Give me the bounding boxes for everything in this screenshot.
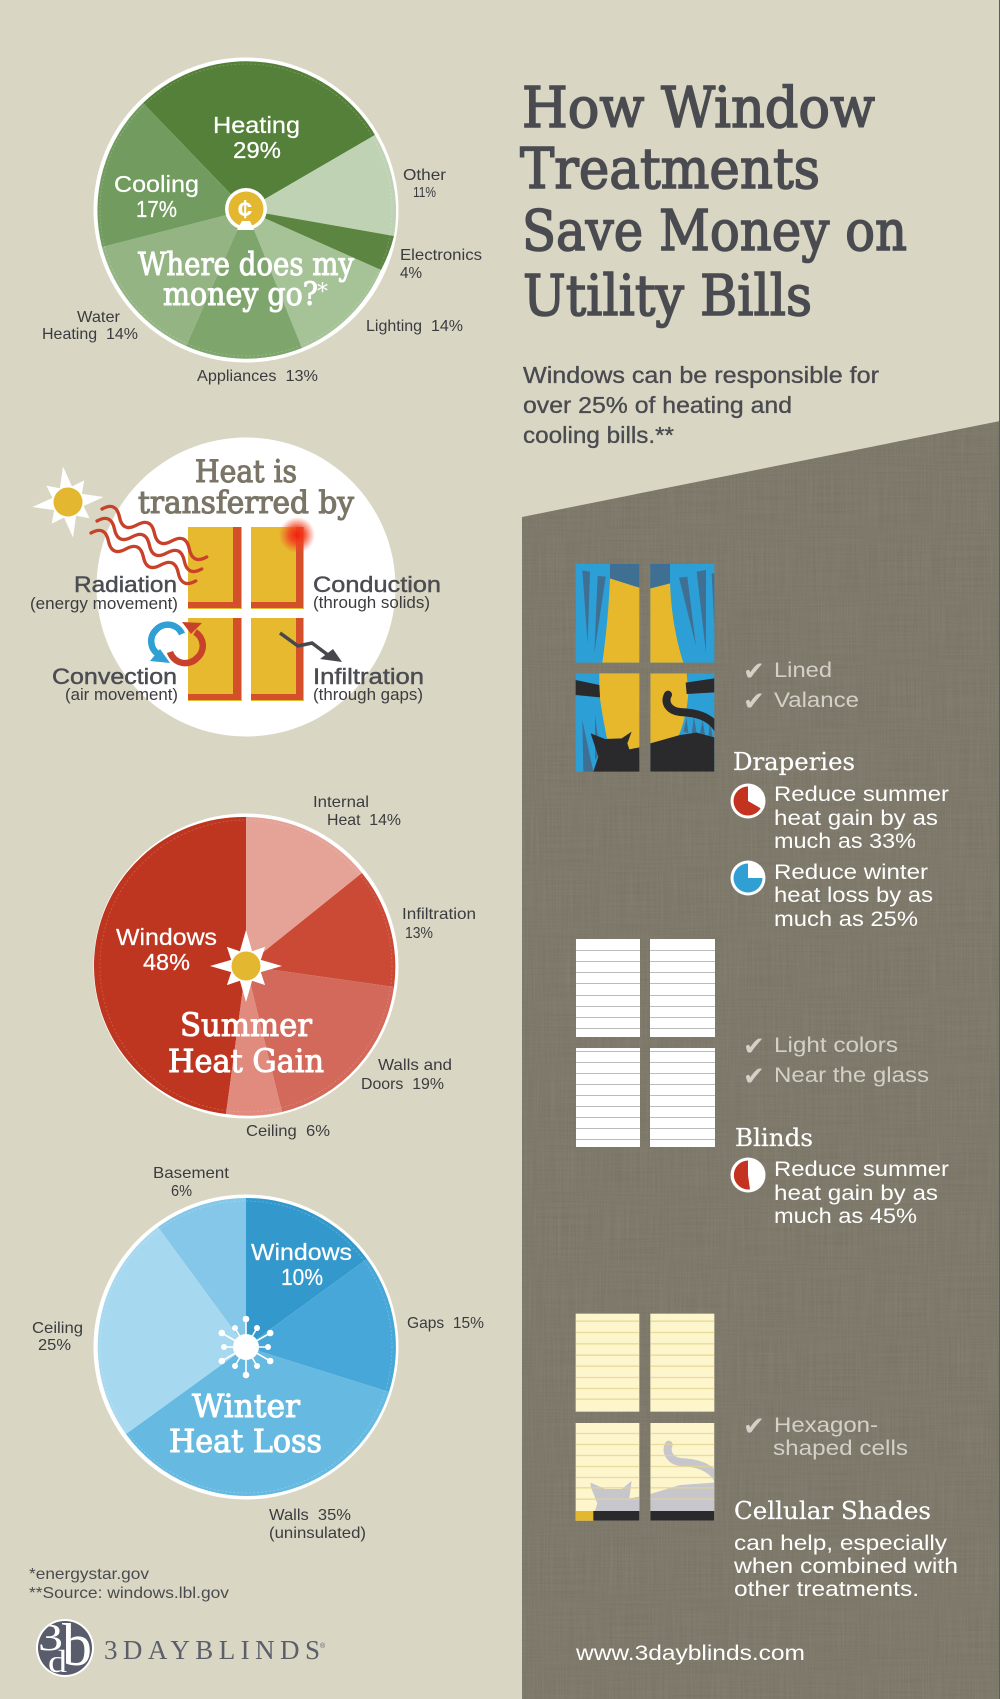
pane: bottom left with cat	[576, 1423, 639, 1521]
chart title: where does my money go: Where does my	[138, 245, 354, 283]
label: conduction: (through solids)	[313, 594, 430, 612]
label: internal heat	[313, 794, 401, 829]
checklist: draperies: ✔	[743, 687, 765, 717]
label: appliances: Appliances 13%	[197, 368, 318, 385]
label: water heating	[42, 309, 138, 343]
logo: 3dayblinds	[36, 1619, 326, 1677]
label: infiltration: Infiltration	[313, 664, 424, 689]
logo: 3dayblinds: ®	[320, 1642, 326, 1650]
label: walls and doors	[361, 1057, 452, 1093]
pane: top left	[576, 1314, 639, 1412]
logo mark: b	[62, 1612, 92, 1678]
title	[520, 76, 907, 329]
slice: appliances 13%	[186, 210, 302, 359]
slice: gaps 15%	[246, 1259, 396, 1392]
chart title: where does my money go: money go?	[163, 275, 318, 313]
slice: water heating 14%	[102, 210, 246, 346]
slice: walls 35%	[126, 1347, 389, 1496]
label: heating: Heating	[213, 112, 300, 138]
label: ceiling	[32, 1320, 83, 1354]
chart title: summer heat gain: Heat Gain	[168, 1042, 324, 1080]
checklist: cellular shades: shaped cells	[773, 1436, 908, 1460]
pane: top right	[650, 564, 714, 663]
label: walls and doors: Walls and	[378, 1057, 452, 1074]
checklist: draperies: Lined	[774, 658, 832, 682]
pane: top right	[650, 1314, 714, 1412]
footnotes: **Source: windows.lbl.gov	[29, 1585, 229, 1602]
logo mark: d	[48, 1643, 67, 1679]
text: reduce summer heat gain 45%: Reduce summer	[774, 1157, 949, 1181]
slice: windows 10%	[246, 1198, 367, 1347]
label: radiation	[30, 572, 178, 613]
label: electronics: Electronics	[400, 247, 482, 264]
pie chart: where does my money go	[94, 58, 398, 362]
text: reduce winter heat loss 25%: heat loss by as	[774, 883, 933, 907]
checklist: cellular shades: ✔	[743, 1412, 765, 1442]
slice: walls and doors 19%	[246, 966, 394, 1112]
checklist: blinds: Near the glass	[774, 1063, 929, 1087]
label: walls and doors: Doors 19%	[361, 1076, 444, 1093]
chart title: winter heat loss	[169, 1387, 322, 1460]
logo mark	[36, 1619, 94, 1677]
label: basement: Basement	[153, 1165, 230, 1182]
logo mark: 3	[38, 1617, 63, 1659]
illustration: cellular shades window	[576, 1314, 718, 1521]
text: reduce summer heat gain 45%: heat gain by as	[774, 1181, 938, 1205]
title: Treatments	[520, 137, 820, 202]
label: heating	[213, 112, 300, 163]
window panes	[188, 527, 304, 701]
slice: internal heat 14%	[246, 817, 362, 966]
pane: bottom right with cat	[650, 673, 718, 772]
label: basement	[153, 1165, 230, 1200]
slice: basement 6%	[158, 1198, 246, 1347]
chart title: where does my money go	[138, 245, 354, 313]
icon: sun	[27, 461, 109, 543]
checklist: draperies	[743, 657, 859, 717]
text: reduce summer heat gain 45%: much as 45%	[774, 1204, 917, 1228]
label: electronics: 4%	[400, 265, 422, 282]
label: cooling	[114, 171, 199, 222]
text: reduce winter heat loss 25%: much as 25%	[774, 907, 918, 931]
checklist: draperies: Valance	[774, 688, 859, 712]
subtitle text: over 25% of heating and	[523, 392, 792, 418]
heading: heat is transferred by	[138, 454, 354, 521]
label: gaps: Gaps 15%	[407, 1315, 484, 1332]
website url: www.3dayblinds.com	[575, 1641, 805, 1665]
pie chart: winter heat loss	[94, 1194, 398, 1500]
label: ceiling: Ceiling	[32, 1320, 83, 1337]
subtitle text: cooling bills.**	[523, 422, 674, 448]
icon: pie 25%	[730, 860, 766, 896]
label: windows 48%	[116, 924, 217, 975]
label: other	[403, 167, 447, 201]
slice: lighting 14%	[246, 210, 381, 348]
title: Utility Bills	[523, 264, 812, 329]
label: internal heat: Heat 14%	[327, 812, 401, 829]
label: windows 10%: Windows	[251, 1239, 352, 1265]
illustration: blinds window	[576, 939, 715, 1147]
icon: conduction heat glow	[279, 517, 315, 553]
slice: ceiling 6%	[226, 966, 282, 1116]
text: reduce winter heat loss 25%: Reduce winter	[774, 860, 928, 884]
checklist: blinds	[743, 1032, 929, 1092]
label: windows 10%: 10%	[281, 1264, 323, 1290]
label: conduction: Conduction	[313, 572, 441, 597]
label: infiltration	[313, 664, 424, 704]
label: windows 48%: 48%	[143, 949, 190, 975]
slice: infiltration 13%	[246, 873, 395, 987]
slice: electronics 4%	[246, 210, 394, 270]
heading: heat is transferred by: Heat is	[195, 454, 297, 490]
heading: heat is transferred by: transferred by	[138, 485, 354, 521]
slice: other 11%	[246, 135, 396, 236]
checklist: blinds: ✔	[743, 1062, 765, 1092]
chart title: where does my money go: *	[317, 280, 328, 305]
chart title: winter heat loss: Heat Loss	[169, 1422, 322, 1460]
heading: draperies: Draperies	[733, 748, 855, 776]
panel: heat transfer	[30, 438, 441, 736]
label: cooling: 17%	[136, 196, 177, 222]
subtitle text: Windows can be responsible for	[523, 362, 879, 388]
chart title: summer heat gain	[168, 1006, 324, 1080]
checklist: blinds: ✔	[743, 1032, 765, 1062]
text: can help: other treatments.	[734, 1577, 919, 1601]
label: walls	[269, 1507, 366, 1542]
label: convection: (air movement)	[65, 686, 178, 704]
illustration: draperies window	[576, 564, 718, 772]
icon: pie 33%	[730, 784, 766, 818]
checklist: draperies: ✔	[743, 657, 765, 687]
label: heating: 29%	[233, 137, 281, 163]
label: windows 10%	[251, 1239, 352, 1290]
label: ceiling: 25%	[38, 1337, 71, 1354]
label: walls: (uninsulated)	[269, 1525, 366, 1542]
subtitle text	[523, 362, 879, 448]
icon: cent coin hub: ¢	[238, 194, 252, 224]
text: can help: when combined with	[733, 1554, 958, 1578]
checklist: blinds: Light colors	[774, 1033, 898, 1057]
text: reduce summer heat gain 45%	[774, 1157, 949, 1228]
dark window panel background	[522, 421, 1000, 1699]
text: reduce summer heat gain 33%	[774, 782, 949, 853]
checklist: cellular shades: Hexagon-	[774, 1413, 878, 1437]
icon: cent coin hub	[225, 188, 267, 230]
label: radiation: Radiation	[74, 572, 177, 597]
label: water heating: Heating 14%	[42, 326, 138, 343]
label: convection: Convection	[52, 664, 177, 689]
icon: sun	[210, 930, 282, 1002]
label: walls: Walls 35%	[269, 1507, 351, 1524]
checklist: cellular shades	[743, 1412, 908, 1460]
logo wordmark: 3DAYBLINDS	[104, 1635, 320, 1665]
text: reduce summer heat gain 33%: heat gain by as	[774, 806, 938, 830]
text: reduce summer heat gain 33%: much as 33%	[774, 829, 916, 853]
footnotes	[29, 1566, 229, 1602]
label: other: Other	[403, 167, 447, 184]
label: infiltration: 13%	[405, 925, 433, 942]
pie chart: summer heat gain	[94, 814, 398, 1118]
heading: blinds: Blinds	[735, 1124, 813, 1152]
slice: ceiling 25%	[98, 1227, 246, 1434]
label: radiation: (energy movement)	[30, 595, 178, 613]
label: ceiling: Ceiling 6%	[246, 1123, 330, 1140]
slice: cooling 17%	[97, 103, 246, 247]
chart title: winter heat loss: Winter	[192, 1387, 301, 1425]
title: Save Money on	[522, 199, 907, 264]
icon: snowflake	[218, 1316, 274, 1378]
label: infiltration: (through gaps)	[313, 686, 423, 704]
label: lighting: Lighting 14%	[366, 318, 463, 335]
text: can help: can help, especially	[734, 1531, 947, 1555]
label: cooling: Cooling	[114, 171, 199, 197]
pane: bottom right with cat	[650, 1423, 718, 1521]
pane: bottom left with cat	[576, 673, 639, 772]
label: internal heat: Internal	[313, 794, 369, 811]
icon: convection arrows	[150, 622, 203, 663]
label: conduction	[313, 572, 441, 612]
slice: windows 48%	[94, 817, 246, 1114]
slice: heating 29%	[143, 61, 375, 210]
label: basement: 6%	[171, 1183, 192, 1200]
icon: radiation waves	[88, 503, 209, 587]
pane: top left	[576, 564, 639, 663]
heading: cellular shades: Cellular Shades	[734, 1497, 931, 1525]
label: windows 48%: Windows	[116, 924, 217, 950]
text: reduce winter heat loss 25%	[774, 860, 933, 931]
text: reduce summer heat gain 33%: Reduce summer	[774, 782, 949, 806]
chart title: summer heat gain: Summer	[180, 1006, 313, 1044]
label: water heating: Water	[77, 309, 121, 326]
footnotes: *energystar.gov	[29, 1566, 149, 1583]
title: How Window	[522, 76, 875, 141]
label: convection	[52, 664, 178, 704]
label: other: 11%	[413, 185, 436, 201]
label: infiltration: Infiltration	[402, 906, 476, 923]
label: electronics	[400, 247, 482, 282]
icon: infiltration arrow	[280, 633, 342, 662]
text: can help	[733, 1531, 958, 1601]
label: infiltration	[402, 906, 476, 942]
icon: pie 45%	[730, 1158, 766, 1192]
